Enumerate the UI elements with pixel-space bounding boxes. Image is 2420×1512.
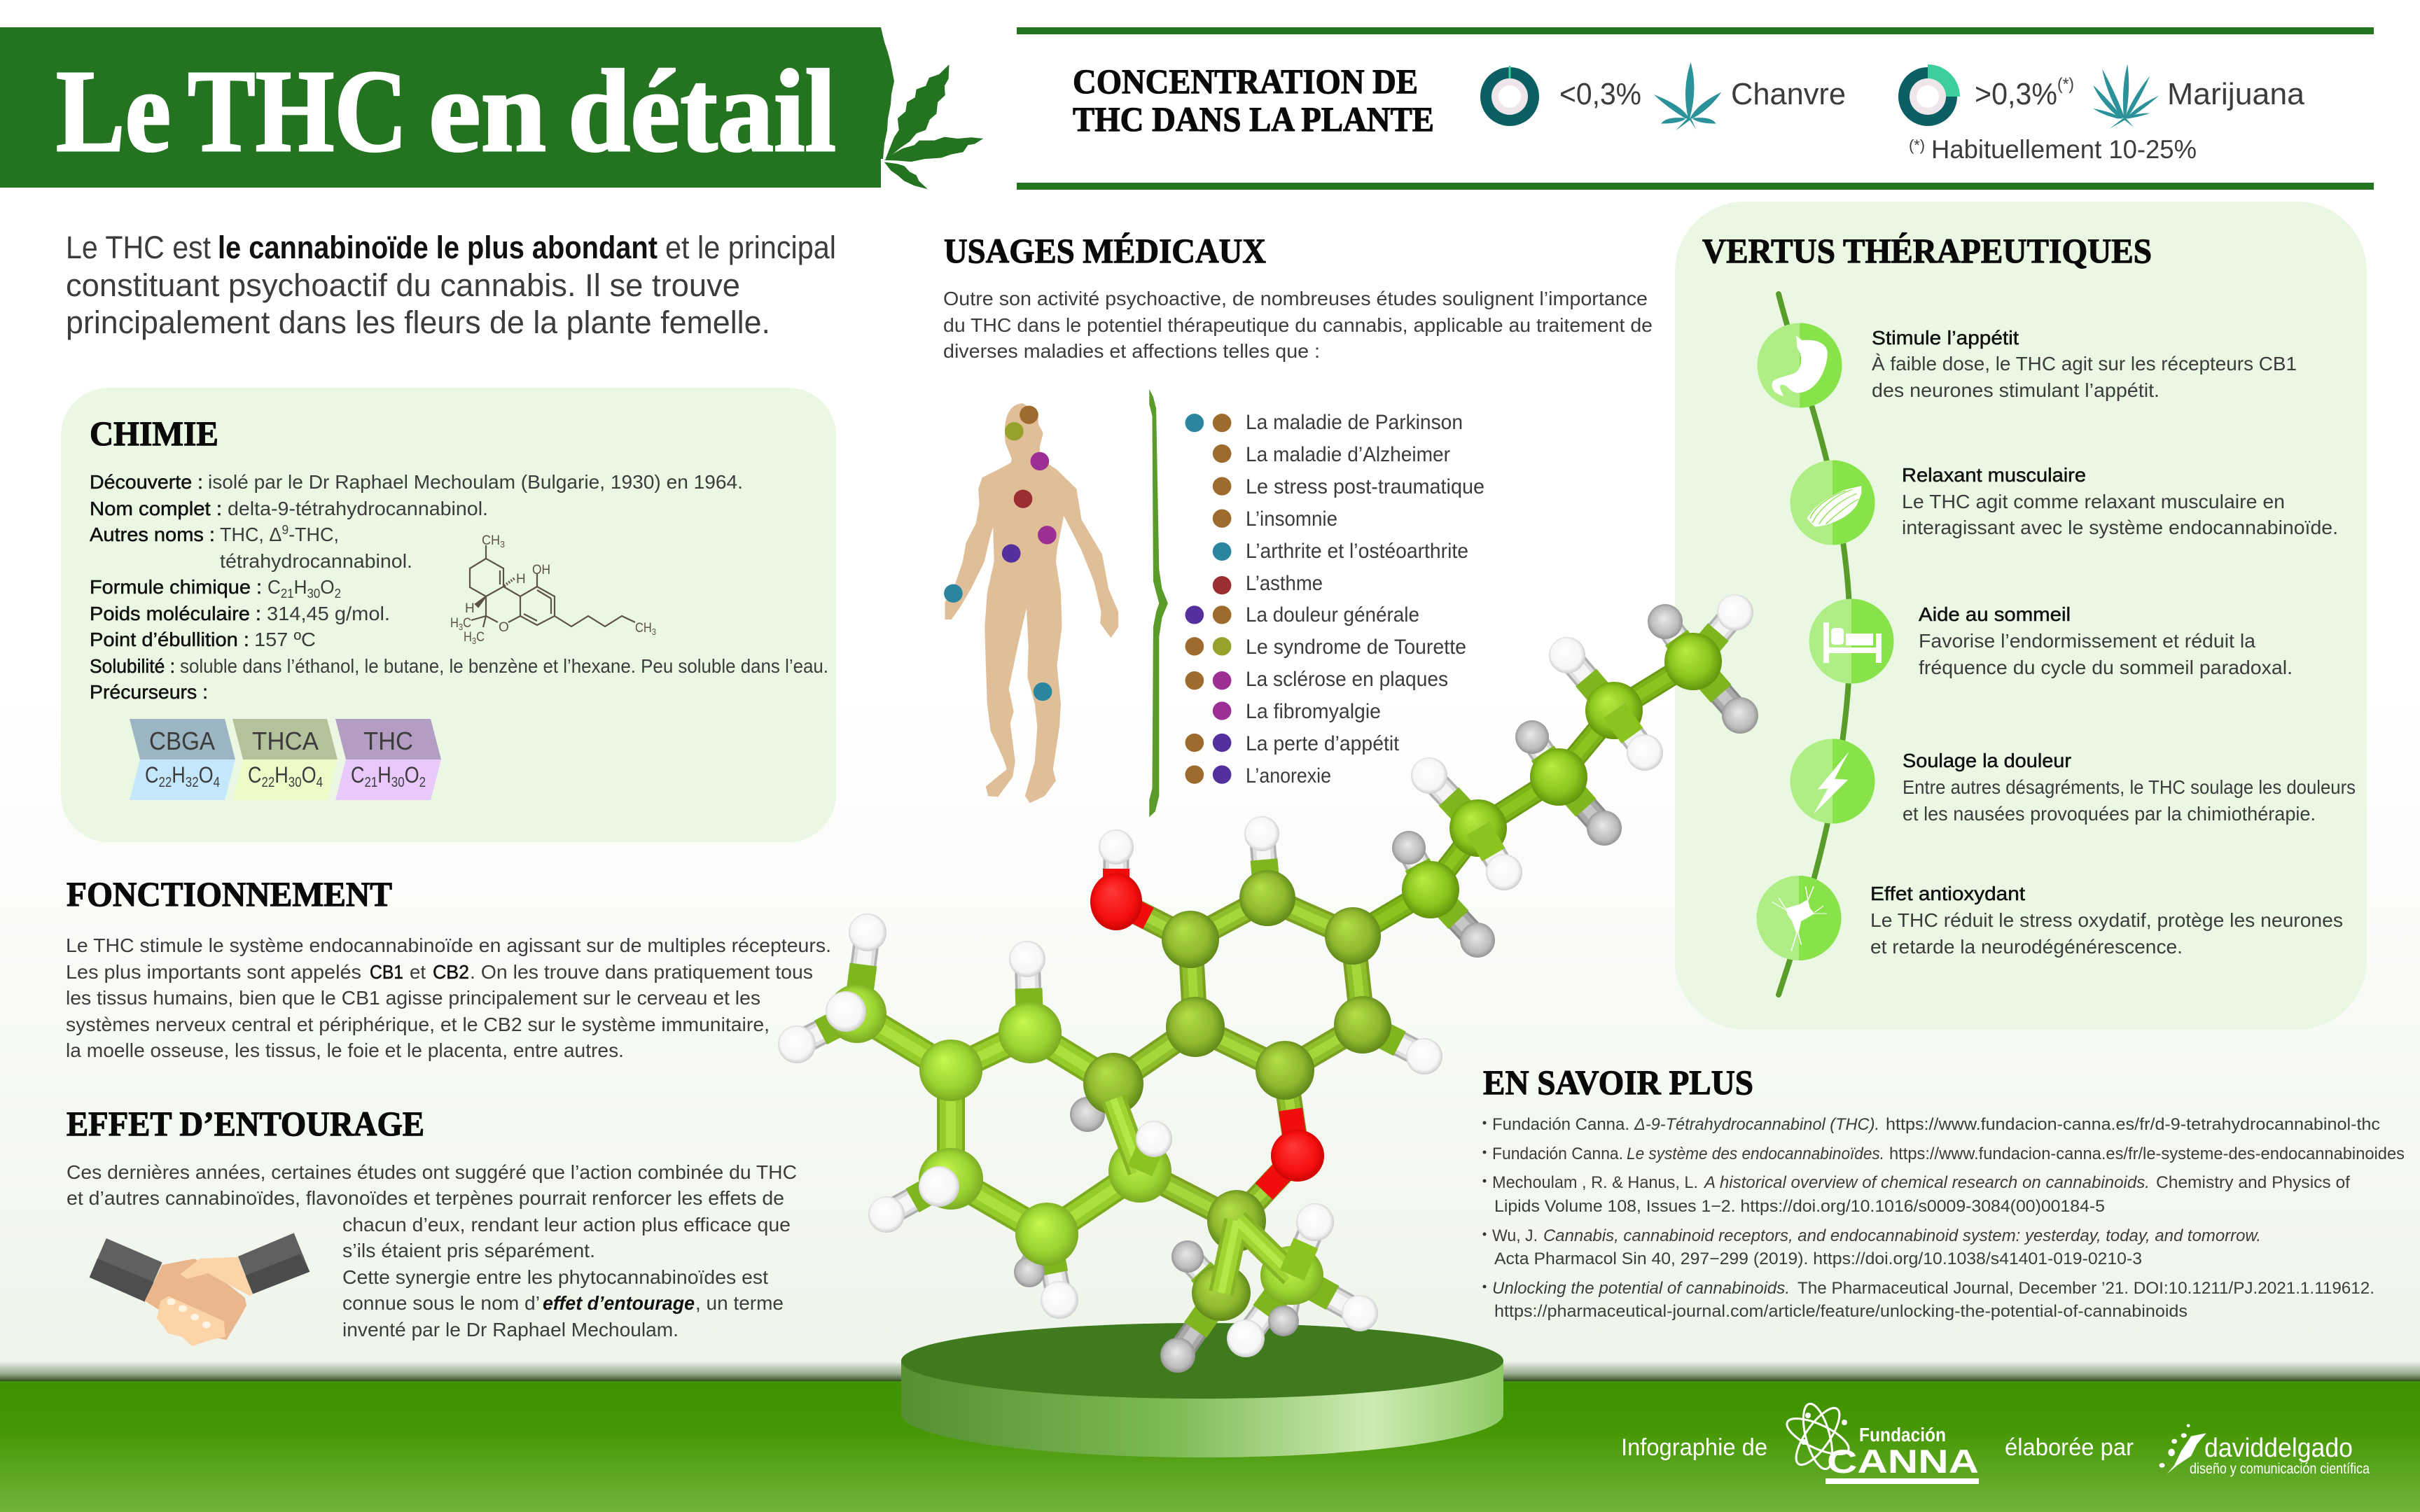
chemical structure of THC: H — [464, 630, 473, 645]
list of conditions with coloured dots: Le stress post-traumatique — [1246, 475, 1484, 498]
chemistry facts — [90, 471, 828, 703]
intro text — [66, 230, 836, 340]
label: chanvre: Chanvre — [1731, 77, 1846, 111]
title: Le — [56, 46, 171, 176]
usages intro text — [943, 288, 1653, 362]
footnote: habituellement: Habituellement 10-25% — [1931, 135, 2197, 164]
heading: concentration de THC: CONCENTRATION DE — [1073, 62, 1418, 101]
references list: Acta Pharmacol Sin 40, 297−299 (2019). https://doi.org/10.1038/s41401-019-0210-3 — [1494, 1250, 2142, 1268]
logo: david delgado: daviddelgado — [2204, 1434, 2353, 1463]
title banner — [0, 27, 894, 188]
logo: Fundación Canna: Fundación — [1859, 1424, 1946, 1446]
list of conditions with coloured dots: La maladie d’Alzheimer — [1246, 443, 1450, 466]
chemistry facts: 314,45 g/mol. — [267, 603, 390, 624]
benefit: stimule l'appétit: Stimule l’appétit — [1872, 327, 2019, 349]
list of conditions with coloured dots: La sclérose en plaques — [1246, 668, 1448, 691]
chemistry facts: 157 ºC — [254, 629, 316, 650]
footer text: infographie de: Infographie de — [1621, 1434, 1767, 1461]
chemistry facts: THC, Δ — [220, 524, 284, 545]
list of conditions with coloured dots: L’arthrite et l’ostéoarthrite — [1246, 540, 1468, 563]
references list: https://pharmaceutical-journal.com/article/feature/unlocking-the-potential-of-cannabinoids — [1494, 1302, 2188, 1321]
references list: Cannabis, cannabinoid receptors, and endocannabinoid system: yesterday, today, and tomorrow. — [1543, 1226, 2261, 1245]
benefit: relaxant musculaire: Le THC agit comme relaxant musculaire en — [1902, 491, 2285, 512]
chemistry facts: Point d’ébullition : — [90, 629, 249, 650]
precursor: THCA — [232, 719, 338, 800]
usages intro text: du THC dans le potentiel thérapeutique du cannabis, applicable au traitement de — [943, 314, 1653, 336]
heading: fonctionnement: FONCTIONNEMENT — [67, 874, 392, 913]
chemistry facts: Nom complet : — [90, 498, 222, 519]
effet d'entourage text: , un terme — [695, 1292, 784, 1314]
effet d'entourage text: effet d’entourage — [543, 1292, 695, 1314]
chemical structure of THC: OH — [532, 563, 550, 578]
chemistry facts: -THC, — [288, 524, 339, 545]
heading: usages médicaux: USAGES MÉDICAUX — [944, 231, 1266, 270]
carbon atoms — [828, 633, 1722, 1321]
precursor: THC: C — [351, 762, 367, 788]
effet d'entourage text: connue sous le nom d’ — [342, 1292, 540, 1314]
benefit: soulage la douleur: et les nausées provoquées par la chimiothérapie. — [1903, 803, 2316, 825]
chemical structure of THC: O — [499, 620, 509, 635]
text: marijuana value: (*) — [2057, 75, 2074, 94]
precursor: CBGA: 32 — [186, 775, 199, 790]
references list: Fundación Canna. — [1492, 1144, 1623, 1163]
heading: concentration de THC — [1073, 62, 1434, 139]
references list: https://www.fundacion-canna.es/fr/d-9-tetrahydrocannabinol-thc — [1886, 1115, 2380, 1134]
list of conditions with coloured dots: La douleur générale — [1246, 603, 1419, 626]
list of conditions with coloured dots: L’anorexie — [1246, 764, 1331, 788]
effet d'entourage text: Cette synergie entre les phytocannabinoïdes est — [342, 1266, 768, 1288]
benefit: stimule l'appétit: des neurones stimulant l’appétit. — [1872, 379, 2160, 401]
logo: david delgado: diseño y comunicación científica — [2190, 1461, 2370, 1477]
references list: A historical overview of chemical research on cannabinoids. — [1703, 1173, 2150, 1192]
front bonds and hydrogen atoms — [826, 710, 1663, 1293]
title: en — [429, 46, 546, 176]
heading: vertus thérapeutiques: VERTUS THÉRAPEUTIQUES — [1702, 231, 2152, 270]
chemistry facts: O — [320, 576, 335, 598]
effet d'entourage text: et d’autres cannabinoïdes, flavonoïdes et terpènes pourrait renforcer les effets de — [67, 1187, 784, 1209]
intro text: Le THC est — [66, 230, 211, 265]
intro text: constituant psychoactif du cannabis. Il se trouve — [66, 267, 740, 303]
precursor: THCA: C — [248, 762, 264, 788]
chemistry facts: C — [267, 576, 281, 598]
chemical structure of THC: C — [476, 630, 485, 645]
benefit: relaxant musculaire: interagissant avec le système endocannabinoïde. — [1902, 517, 2338, 538]
benefit: aide au sommeil: Favorise l’endormissement et réduit la — [1919, 630, 2255, 652]
precursor: THCA: 4 — [317, 775, 323, 790]
effet d'entourage text: chacun d’eux, rendant leur action plus efficace que — [342, 1214, 791, 1236]
precursor: CBGA: H — [172, 762, 186, 788]
label: marijuana: Marijuana — [2167, 77, 2305, 111]
effet d'entourage text — [67, 1161, 797, 1340]
effet d'entourage text: s’ils étaient pris séparément. — [342, 1240, 595, 1261]
list of conditions with coloured dots: La fibromyalgie — [1246, 700, 1381, 723]
hydrogen bonds behind atoms — [797, 612, 1740, 1355]
icon: cannabis leaf beside title — [884, 64, 983, 189]
chemistry facts: 21 — [281, 587, 294, 601]
benefit: relaxant musculaire: Relaxant musculaire — [1902, 464, 2086, 486]
title: THC — [188, 46, 408, 176]
references list — [1483, 1115, 2405, 1321]
list of conditions with coloured dots: L’asthme — [1246, 572, 1323, 595]
fonctionnement text: les tissus humains, bien que le CB1 agisse principalement sur le cerveau et les — [66, 987, 760, 1009]
title: détail — [568, 46, 836, 176]
precursor: THCA: 30 — [288, 775, 302, 790]
benefit: relaxant musculaire — [1902, 464, 2338, 538]
benefit: soulage la douleur: Soulage la douleur — [1903, 750, 2071, 771]
chemistry facts: tétrahydrocannabinol. — [220, 550, 412, 572]
usages intro text: diverses maladies et affections telles que : — [943, 340, 1320, 362]
precursor: THC: O — [405, 762, 419, 788]
logo: Fundación Canna — [1782, 1401, 1979, 1484]
precursor: CBGA: O — [199, 762, 214, 788]
chemical structure of THC: H — [465, 601, 475, 616]
icon: neuron — [1756, 876, 1842, 960]
benefit: effet antioxydant — [1870, 883, 2343, 958]
text: chanvre value: <0,3% — [1559, 77, 1641, 111]
fonctionnement text: et — [410, 961, 426, 983]
intro text: principalement dans les fleurs de la plante femelle. — [66, 304, 770, 340]
chemistry facts: 9 — [281, 523, 288, 537]
chemical structure of THC: 3 — [472, 636, 476, 646]
fonctionnement text: Les plus importants sont appelés — [66, 961, 361, 983]
precursor: THCA: THCA — [252, 727, 319, 755]
heading: en savoir plus: EN SAVOIR PLUS — [1483, 1063, 1753, 1102]
donut: marijuana — [1898, 64, 1960, 126]
references list: Unlocking the potential of cannabinoids. — [1492, 1279, 1790, 1298]
precursor: CBGA: 4 — [214, 775, 220, 790]
precursor: THC: THC — [363, 727, 413, 755]
precursor: THC: H — [377, 762, 391, 788]
fonctionnement text: Le THC stimule le système endocannabinoïde en agissant sur de multiples récepteurs. — [66, 934, 831, 956]
references list: Le système des endocannabinoïdes. — [1627, 1144, 1884, 1163]
panel: vertus thérapeutiques — [1675, 202, 2367, 1030]
chemical structure of THC: CH — [482, 533, 501, 548]
intro text: le cannabinoïde le plus abondant — [218, 230, 658, 265]
benefit: effet antioxydant: Le THC réduit le stress oxydatif, protège les neurones — [1870, 909, 2343, 931]
chemistry facts: isolé par le Dr Raphael Mechoulam (Bulgarie, 1930) en 1964. — [208, 471, 743, 493]
chemical structure of THC: H — [450, 616, 460, 631]
chemical structure of THC: 3 — [652, 626, 656, 637]
text: marijuana value: >0,3% — [1975, 77, 2057, 111]
chemistry facts: Précurseurs : — [90, 681, 208, 703]
hydrogen atoms behind — [778, 594, 1753, 1357]
icon: lightning bolt — [1790, 739, 1875, 823]
references list: Δ-9-Tétrahydrocannabinol (THC). — [1634, 1115, 1879, 1134]
chemical structure of THC: 3 — [459, 622, 463, 632]
fonctionnement text: . On les trouve dans pratiquement tous — [470, 961, 813, 983]
chemistry facts: Poids moléculaire : — [90, 603, 261, 624]
effet d'entourage text: inventé par le Dr Raphael Mechoulam. — [342, 1319, 679, 1340]
icon: handshake — [90, 1233, 310, 1346]
precursor: THCA: O — [302, 762, 317, 788]
list of conditions with coloured dots — [1185, 411, 1484, 788]
effet d'entourage text: Ces dernières années, certaines études ont suggéré que l’action combinée du THC — [67, 1161, 797, 1183]
fonctionnement text: CB1 — [370, 961, 403, 983]
benefit: effet antioxydant: et retarde la neurodégénérescence. — [1870, 936, 2183, 958]
precursor: THCA: H — [274, 762, 288, 788]
references list: https://www.fundacion-canna.es/fr/le-systeme-des-endocannabinoides — [1889, 1144, 2405, 1163]
references list: Mechoulam , R. & Hanus, L. — [1492, 1173, 1698, 1192]
logo: Fundación Canna: CANNA — [1827, 1443, 1979, 1480]
references list: Chemistry and Physics of — [2156, 1173, 2350, 1192]
stem connecting the benefit icons — [1779, 294, 1850, 995]
precursor: THC — [335, 719, 441, 800]
precursor: THC: 21 — [365, 775, 377, 790]
chemistry facts: H — [294, 576, 307, 598]
benefit: aide au sommeil: fréquence du cycle du sommeil paradoxal. — [1919, 657, 2293, 678]
brace — [1149, 389, 1168, 817]
carbon-carbon bonds — [857, 662, 1693, 1234]
chemistry facts: Solubilité : — [90, 655, 175, 677]
precursor: CBGA: C — [145, 762, 161, 788]
references list: Fundación Canna. — [1492, 1115, 1629, 1134]
list of conditions with coloured dots: L’insomnie — [1246, 507, 1337, 531]
concentration header rules — [1017, 27, 2374, 190]
references list: Lipids Volume 108, Issues 1−2. https://doi.org/10.1016/s0009-3084(00)00184-5 — [1494, 1197, 2105, 1216]
chemistry facts: Autres noms : — [90, 524, 215, 545]
heading: chimie: CHIMIE — [90, 414, 218, 453]
3D molecule of THC — [778, 594, 1758, 1373]
panel: chimie — [61, 388, 836, 842]
list of conditions with coloured dots: La perte d’appétit — [1246, 732, 1400, 755]
podium — [901, 1323, 1503, 1457]
precursor: THC: 2 — [419, 775, 426, 790]
icon: stomach — [1758, 323, 1842, 407]
footer text: élaborée par: élaborée par — [2005, 1434, 2134, 1461]
chemical structure of THC — [450, 533, 656, 646]
chemical structure of THC: CH — [635, 621, 654, 636]
benefit: stimule l'appétit: À faible dose, le THC agit sur les récepteurs CB1 — [1872, 353, 2297, 374]
chemistry facts: 2 — [335, 587, 341, 601]
title — [56, 46, 836, 176]
intro text: et le principal — [665, 230, 836, 265]
precursor: THC: 30 — [391, 775, 405, 790]
fonctionnement text: systèmes nerveux central et périphérique, et le CB2 sur le système immunitaire, — [66, 1014, 770, 1035]
usages intro text: Outre son activité psychoactive, de nombreuses études soulignent l’importance — [943, 288, 1648, 309]
benefit: aide au sommeil: Aide au sommeil — [1919, 603, 2071, 625]
precursor: CBGA: CBGA — [149, 727, 215, 755]
icon: bed — [1809, 599, 1893, 683]
benefit: effet antioxydant: Effet antioxydant — [1870, 883, 2025, 904]
footnote: habituellement: (*) — [1909, 136, 1925, 154]
list of conditions with coloured dots: Le syndrome de Tourette — [1246, 636, 1466, 659]
icon: chanvre leaf — [1654, 62, 1721, 131]
chemistry facts: delta-9-tétrahydrocannabinol. — [228, 498, 488, 519]
precursor: THCA: 22 — [262, 775, 274, 790]
benefit: soulage la douleur — [1903, 750, 2356, 825]
references list: Wu, J. — [1492, 1226, 1538, 1245]
fonctionnement text: CB2 — [433, 961, 469, 983]
icon: muscle — [1790, 461, 1875, 545]
chemistry facts: 30 — [307, 587, 320, 601]
heading: effet d'entourage: EFFET D’ENTOURAGE — [67, 1104, 424, 1143]
footer band — [0, 1362, 2420, 1512]
precursor: CBGA: 22 — [159, 775, 172, 790]
oxygen atoms — [1090, 873, 1324, 1182]
benefit: aide au sommeil — [1919, 603, 2293, 678]
list of conditions with coloured dots: La maladie de Parkinson — [1246, 411, 1463, 434]
donut: chanvre — [1480, 66, 1539, 126]
chemistry facts: Découverte : — [90, 471, 203, 493]
fonctionnement text: la moelle osseuse, les tissus, le foie et le placenta, entre autres. — [66, 1040, 624, 1061]
benefit: soulage la douleur: Entre autres désagréments, le THC soulage les douleurs — [1903, 776, 2356, 798]
chemical structure of THC: H — [516, 572, 526, 587]
chemistry facts: soluble dans l’éthanol, le butane, le benzène et l’hexane. Peu soluble dans l’eau. — [180, 655, 828, 677]
logo: david delgado — [2160, 1424, 2370, 1477]
benefit: stimule l'appétit — [1872, 327, 2297, 401]
chemical structure of THC: 3 — [500, 539, 505, 550]
fonctionnement text — [66, 934, 831, 1061]
heading: concentration de THC: THC DANS LA PLANTE — [1073, 99, 1434, 139]
chemical structure of THC: C — [463, 616, 471, 631]
human body figure with dots — [944, 403, 1118, 803]
icon: marijuana leaf — [2093, 64, 2159, 129]
references list: The Pharmaceutical Journal, December ’21. DOI:10.1211/PJ.2021.1.119612. — [1797, 1279, 2374, 1298]
precursor: CBGA — [130, 719, 235, 800]
chemistry facts: Formule chimique : — [90, 576, 262, 598]
